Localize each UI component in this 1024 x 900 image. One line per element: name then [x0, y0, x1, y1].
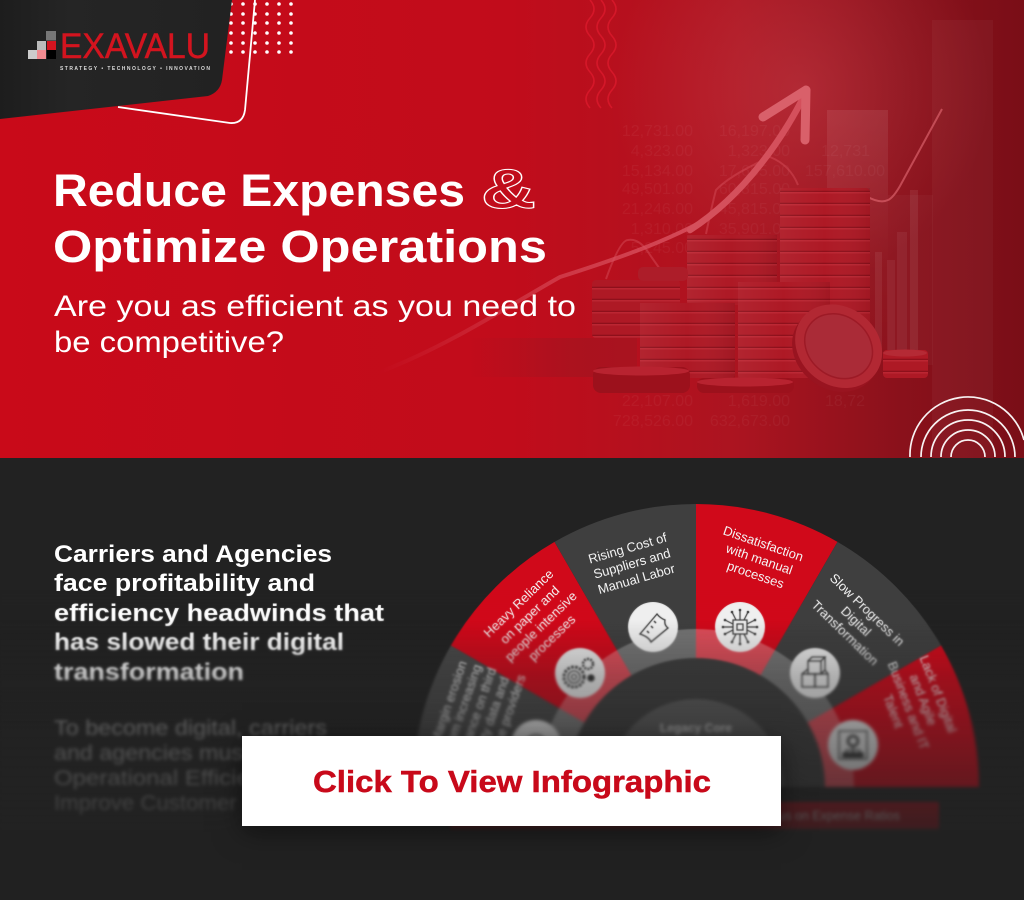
- label: lack of talent: [870, 648, 962, 757]
- segment: heavy reliance: [451, 542, 696, 787]
- faint financial numbers: 632,673.00: [710, 413, 790, 430]
- middle ring: [538, 629, 854, 787]
- segment: slow progress: [696, 542, 941, 787]
- headline paragraph: [54, 541, 384, 686]
- faint financial numbers: 21,246.00: [622, 201, 693, 218]
- label: dissatisfaction: with manual: [723, 540, 795, 578]
- progressive blur layer 1: [54, 593, 955, 702]
- label: margin erosion: Margin erosion: [428, 659, 470, 745]
- white rounded outline: [118, 0, 255, 123]
- label: heavy reliance: processes: [525, 611, 579, 664]
- logo tagline: STRATEGY • TECHNOLOGY • INNOVATION: [60, 66, 210, 72]
- label: heavy reliance: [480, 565, 591, 676]
- label: rising cost: Rising Cost of: [587, 530, 669, 566]
- label: lack of talent: Business and IT: [885, 659, 932, 752]
- background bar chart: [827, 20, 993, 458]
- secondary paragraph: and agencies must focus on: [54, 742, 344, 765]
- concentric arcs: [910, 397, 1024, 457]
- label: heavy reliance: people intensive: [502, 588, 580, 664]
- faint financial numbers: 5,245.00: [631, 240, 693, 257]
- logo squares: [28, 31, 56, 59]
- label: rising cost: [587, 530, 678, 597]
- faint financial numbers: 60,815.00: [719, 181, 790, 198]
- label: margin erosion: reliance on third: [455, 665, 499, 758]
- stack front centre: [640, 303, 735, 378]
- lower banner behind button: [450, 802, 939, 829]
- segment: dissatisfaction: [696, 504, 838, 787]
- faint financial numbers: 1,323.00: [728, 143, 790, 160]
- faint financial numbers: 157,610.00: [805, 163, 885, 180]
- segment: margin erosion: [413, 646, 696, 787]
- icon: ticket: [628, 602, 678, 652]
- faint financial numbers: 15,134.00: [622, 163, 693, 180]
- stack middle back: [687, 235, 777, 305]
- hero title: Reduce Expenses: [53, 165, 465, 216]
- label: slow progress: Transformation: [809, 597, 881, 668]
- hero subtitle: [54, 290, 576, 359]
- faint financial numbers: 35,901.00: [719, 221, 790, 238]
- headline paragraph: face profitability and: [54, 570, 315, 597]
- headline paragraph: has slowed their digital: [54, 629, 344, 656]
- hero subtitle: be competitive?: [54, 326, 284, 359]
- secondary paragraph: Operational Efficiency and: [54, 767, 334, 790]
- label: dissatisfaction: processes: [725, 558, 786, 592]
- faint financial numbers: 45,815.00: [719, 201, 790, 218]
- label: slow progress: [805, 570, 908, 672]
- faint financial numbers: 1,310.00: [631, 221, 693, 238]
- faint financial numbers: 22,107.00: [622, 393, 693, 410]
- hero background: [0, 0, 1024, 458]
- faint financial numbers: 16,197.00: [719, 123, 790, 140]
- logo: [28, 27, 210, 72]
- core label: Legacy Core: [660, 721, 732, 735]
- logo wordmark: EXAVALU: [60, 27, 210, 66]
- headline paragraph: efficiency headwinds that: [54, 600, 384, 627]
- dark fade overlay: [0, 620, 1024, 900]
- secondary paragraph: Improve Customer Experience: [54, 792, 354, 815]
- far right low stack: [883, 350, 928, 378]
- label: rising cost: Manual Labor: [596, 561, 677, 597]
- flat pile left: [593, 366, 690, 393]
- hero title: Optimize Operations: [53, 221, 547, 272]
- icon: process: [828, 720, 878, 770]
- dot grid: [229, 2, 293, 54]
- faint financial numbers: 17,655.00: [719, 163, 790, 180]
- logo panel: [0, 0, 232, 119]
- label: margin erosion: party data and: [471, 675, 512, 758]
- mountain outlines: [606, 157, 798, 279]
- label: lack of talent: and Agile: [907, 672, 940, 727]
- dark inner ring: [567, 658, 825, 787]
- icon: chip: [715, 602, 765, 652]
- stack front right: [738, 282, 830, 378]
- hero title: [53, 165, 547, 272]
- progressive blur layer 2: [54, 636, 971, 745]
- faint financial numbers: 49,501.00: [622, 181, 693, 198]
- button label: Click To View Infographic: [313, 764, 711, 799]
- faint financial numbers: 18,72: [825, 393, 865, 410]
- label: heavy reliance: Heavy Reliance: [481, 566, 556, 640]
- core: [608, 699, 784, 787]
- thin trend line: [866, 109, 942, 201]
- coin stacks: [470, 188, 928, 409]
- flat pile right: [697, 378, 794, 393]
- label: lack of talent: Talent: [880, 692, 907, 730]
- label: margin erosion: service providers: [482, 672, 529, 770]
- lower panel background: [0, 458, 1024, 900]
- secondary paragraph: [54, 717, 354, 815]
- label: margin erosion: [426, 653, 529, 770]
- label: dissatisfaction: [712, 523, 807, 595]
- label: heavy reliance: on paper and: [497, 583, 562, 647]
- label: slow progress: Slow Progress in: [827, 570, 908, 649]
- faint financial numbers: 728,526.00: [613, 413, 693, 430]
- faint financial numbers: 12,731: [821, 143, 870, 160]
- segment: rising cost: [554, 504, 696, 787]
- hero subtitle: Are you as efficient as you need to: [54, 290, 576, 323]
- leaning coin: [775, 287, 899, 409]
- icon: gears: [555, 648, 605, 698]
- segment: lack of talent: [696, 646, 979, 787]
- label: margin erosion: from increasing: [441, 662, 484, 751]
- faint financial numbers: [613, 123, 885, 430]
- stack left back: [592, 267, 688, 338]
- semicircle diagram: [413, 504, 979, 787]
- lower banner behind button: Focus on Expense Ratios: [758, 809, 900, 823]
- ampersand outline: &: [481, 157, 536, 220]
- label: dissatisfaction: Dissatisfaction: [721, 523, 805, 564]
- secondary paragraph: To become digital, carriers: [54, 717, 327, 740]
- call to action button: [242, 736, 781, 826]
- headline paragraph: transformation: [54, 659, 244, 686]
- faint financial numbers: 4,323.00: [631, 143, 693, 160]
- icon: boxes: [790, 648, 840, 698]
- faint financial numbers: 12,731.00: [622, 123, 693, 140]
- progressive blur layer 3: [60, 718, 978, 786]
- label: lack of talent: Lack of Digital: [917, 653, 960, 735]
- stack top right: [780, 188, 870, 338]
- label: slow progress: Digital: [838, 603, 874, 639]
- label: rising cost: Suppliers and: [592, 545, 672, 582]
- headline paragraph: Carriers and Agencies: [54, 541, 332, 568]
- squiggle lines: [586, 0, 616, 108]
- faint financial numbers: 1,619.00: [728, 393, 790, 410]
- growth arrow: [380, 90, 806, 372]
- icon: margin: [511, 720, 561, 770]
- low left stack: [470, 338, 637, 377]
